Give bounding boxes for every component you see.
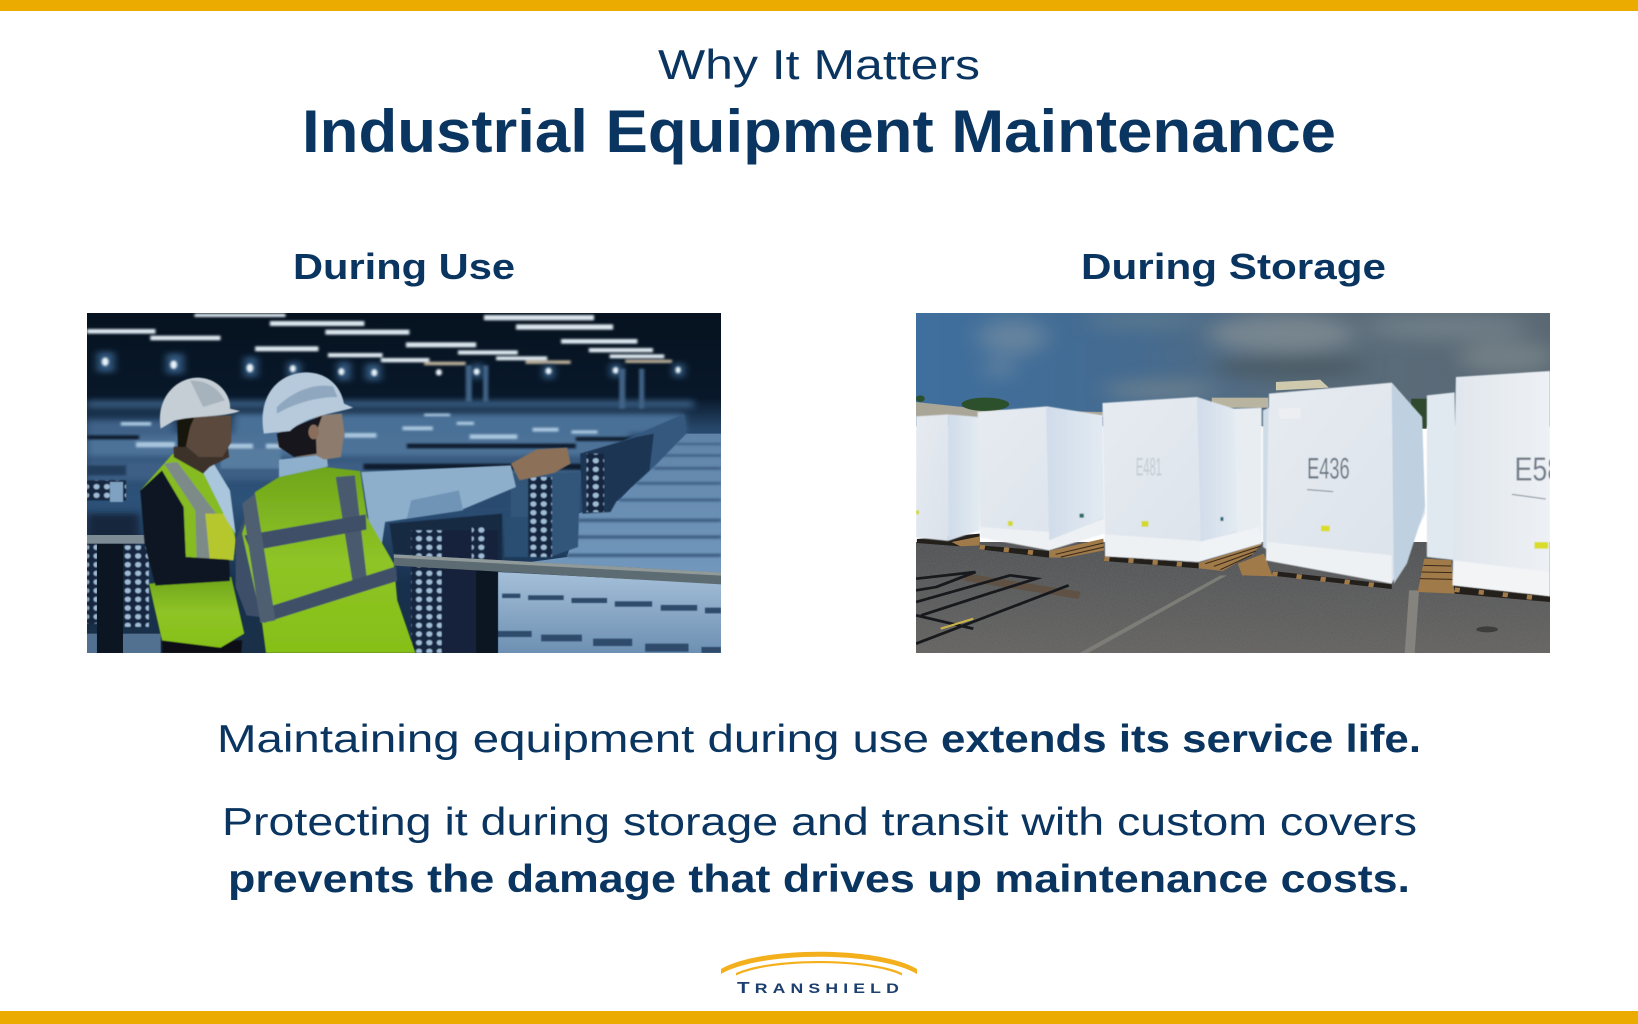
asphalt ground <box>916 542 1550 653</box>
text block: storage and transit statement: Protecting it during storage and transit with custom covers <box>222 801 1417 844</box>
sky with clouds <box>916 313 1554 426</box>
server rack walls <box>87 414 686 653</box>
wrapped unit: second <box>978 406 1104 550</box>
logo: Transhield: T RANSHIELD <box>737 980 904 997</box>
photo: wrapped units in outdoor storage <box>916 313 1550 653</box>
logo: Transhield <box>721 952 917 997</box>
photo: engineers in data centre <box>87 313 721 653</box>
text block: service life statement: Maintaining equipment during use <box>217 718 929 761</box>
room background <box>87 313 721 653</box>
heading: During Storage: During Storage <box>1081 246 1386 287</box>
wrapped unit: third <box>1102 397 1262 562</box>
text block: service life statement <box>217 718 1421 761</box>
wrapped unit: far left <box>916 414 980 541</box>
subtitle: Why It Matters: Why It Matters <box>658 41 980 88</box>
heading: During Use: During Use <box>293 246 515 287</box>
wrapped unit: front right <box>1427 371 1562 596</box>
wrapped unit: fourth <box>1263 383 1425 584</box>
wrapped unit: fourth: E436 <box>1307 453 1350 486</box>
top accent bar <box>0 0 1638 11</box>
text block: service life statement: extends its service life. <box>941 718 1421 761</box>
wall lamps <box>97 352 684 409</box>
raised floor <box>87 434 721 653</box>
worker: right <box>236 372 571 653</box>
text block: storage and transit statement: prevents the damage that drives up maintenance costs. <box>228 858 1410 901</box>
bottom accent bar <box>0 1011 1638 1024</box>
title: Industrial Equipment Maintenance: Industrial Equipment Maintenance <box>302 98 1336 165</box>
text block: storage and transit statement <box>222 801 1417 901</box>
worker: left <box>140 378 244 653</box>
ceiling lights <box>87 314 672 365</box>
wrapped unit: third: E481 <box>1136 454 1162 481</box>
steel frame on the ground <box>916 572 1079 644</box>
railing <box>87 535 721 653</box>
pallets <box>917 534 1550 602</box>
distant server racks <box>87 414 641 475</box>
background trees and buildings <box>916 380 1427 429</box>
